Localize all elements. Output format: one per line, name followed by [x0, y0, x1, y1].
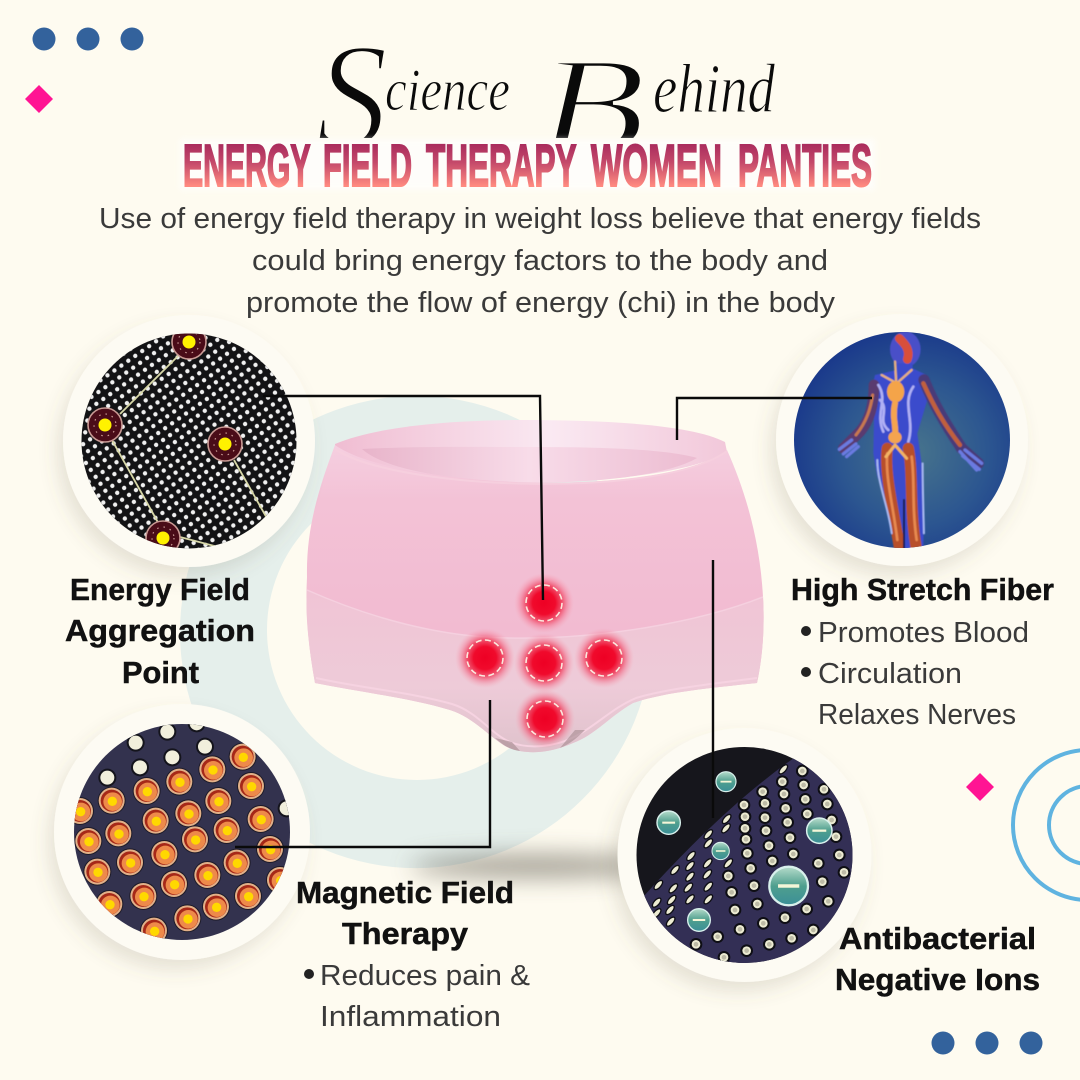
- main heading: PANTIES: [738, 133, 872, 199]
- label: energy field aggregation point: Aggregation: [65, 613, 255, 648]
- intro paragraph: promote the flow of energy (chi) in the body: [246, 287, 836, 319]
- intro paragraph: [99, 203, 981, 319]
- label: antibacterial negative ions: Negative Ions: [835, 962, 1040, 997]
- red energy points: [455, 573, 634, 749]
- label: high stretch fiber: Circulation: [818, 658, 962, 690]
- label: high stretch fiber: Promotes Blood: [818, 617, 1029, 649]
- main heading: ENERGY: [183, 133, 310, 199]
- script title: ehind: [653, 51, 776, 128]
- waistband inner: [362, 447, 697, 482]
- label: energy field aggregation point: [65, 572, 255, 690]
- label: magnetic field therapy: Reduces pain &: [320, 960, 530, 992]
- decorative concentric rings: [1013, 750, 1080, 900]
- label: high stretch fiber: High Stretch Fiber: [791, 572, 1054, 607]
- decorative dots top: [32, 28, 144, 50]
- seam: [307, 590, 763, 638]
- script title: [320, 48, 775, 138]
- waistband back: [335, 420, 727, 482]
- teal ring behind product: [180, 396, 652, 868]
- label: antibacterial negative ions: Antibacterial: [839, 921, 1036, 956]
- label: magnetic field therapy: Therapy: [342, 916, 469, 951]
- crotch shadows: [495, 738, 520, 751]
- heading white halo: [180, 139, 875, 190]
- script title: cience: [385, 57, 510, 123]
- ground shadow: [410, 855, 660, 877]
- intro paragraph: Use of energy field therapy in weight loss believe that energy fields: [99, 203, 981, 235]
- intro paragraph: could bring energy factors to the body and: [252, 245, 828, 277]
- label: magnetic field therapy: Magnetic Field: [296, 875, 514, 910]
- label: high stretch fiber: [791, 572, 1054, 731]
- waist edge: [335, 449, 727, 484]
- label: energy field aggregation point: Energy Field: [70, 572, 250, 607]
- body: [306, 445, 764, 752]
- circle: antibacterial negative ions fabric: [618, 728, 872, 982]
- leg hem: [316, 678, 757, 746]
- label: magnetic field therapy: Inflammation: [320, 1001, 501, 1033]
- script title: S: [316, 13, 388, 179]
- label: antibacterial negative ions: [835, 921, 1040, 997]
- label: magnetic field therapy: [296, 875, 530, 1033]
- decorative diamond top: [25, 85, 53, 113]
- circle: magnetic field therapy fabric: [54, 704, 310, 960]
- circle: high stretch fiber body: [776, 314, 1028, 566]
- lower band shading: [306, 590, 764, 752]
- leader lines: [235, 396, 872, 847]
- circle: aggregation point fabric: [63, 315, 315, 567]
- main heading: WOMEN: [591, 133, 722, 199]
- label: energy field aggregation point: Point: [122, 655, 199, 690]
- decorative diamond right: [966, 773, 994, 801]
- decorative dots bottom: [932, 1032, 1042, 1054]
- product: pink panties: [306, 420, 764, 752]
- main heading: FIELD: [323, 133, 412, 199]
- script title: B: [538, 31, 646, 180]
- silhouette: [890, 331, 921, 367]
- label: high stretch fiber: Relaxes Nerves: [818, 699, 1016, 731]
- main heading: THERAPY: [426, 133, 576, 199]
